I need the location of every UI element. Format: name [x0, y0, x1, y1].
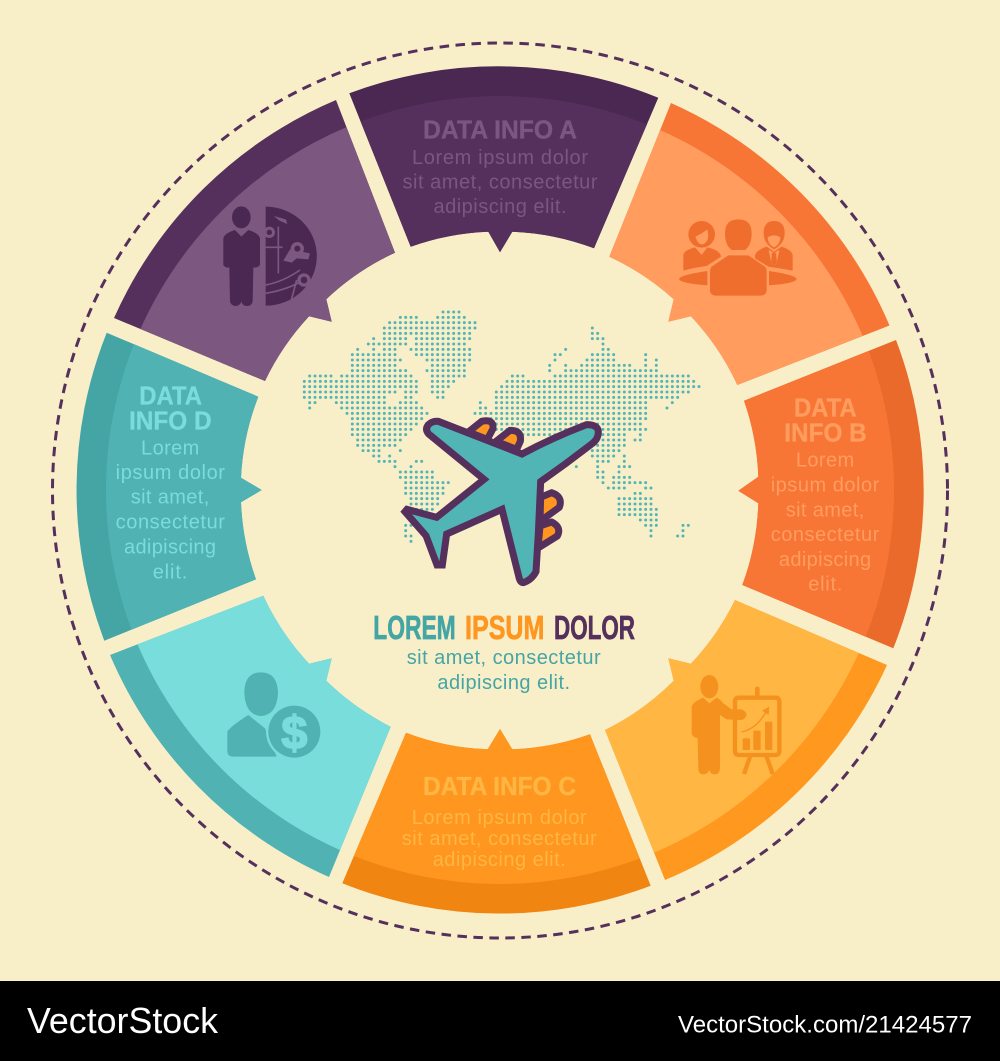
engine: wing bottom inner [538, 522, 559, 548]
panel: data info C [342, 729, 651, 914]
title: lorem ipsum dolor [373, 609, 635, 646]
text block: B: ipsum dolor [771, 475, 880, 497]
engine: wing top inner [496, 430, 521, 449]
heading: data info B [784, 393, 867, 448]
text block: D: ipsum dolor [116, 462, 225, 484]
heading: data info A: DATA INFO A [423, 115, 577, 145]
title: lorem ipsum dolor: LOREM [373, 609, 456, 646]
plane body [405, 421, 598, 583]
text block: B: elit. [808, 574, 842, 596]
text block: C: Lorem ipsum dolor [412, 807, 587, 829]
heading: data info D [129, 381, 212, 435]
text block: B: consectetur [771, 524, 880, 546]
text block: D: adipiscing [124, 536, 216, 558]
panel: data info D [77, 333, 262, 641]
text block: C: sit amet, consectetur [402, 828, 597, 850]
panel: data info A [349, 66, 658, 252]
panel: lower left, finance [110, 596, 391, 877]
footer bar [0, 981, 1000, 1061]
text block: C [402, 807, 597, 871]
panel: data info B [738, 340, 924, 648]
title: lorem ipsum dolor: DOLOR [554, 609, 635, 646]
subtitle: adipiscing elit. [437, 672, 570, 694]
text block: D: sit amet, [131, 487, 209, 509]
icon: team meeting [679, 219, 797, 296]
icon: presenter with chart [692, 675, 779, 774]
text block: C: adipiscing elit. [433, 849, 566, 871]
heading: data info C: DATA INFO C [423, 771, 576, 801]
text block: B: adipiscing [779, 549, 871, 571]
text block: A: Lorem ipsum dolor [412, 147, 588, 169]
text block: D: elit. [153, 561, 187, 583]
text block: A: sit amet, consectetur [402, 172, 598, 194]
text block: D: consectetur [116, 512, 225, 534]
heading: data info B: DATA [794, 393, 857, 423]
panel: upper left, global business [114, 100, 395, 381]
text block: A: adipiscing elit. [434, 196, 566, 218]
icon: person with dollar coin: $ [281, 706, 307, 758]
panel: lower right, presentation [605, 600, 887, 880]
icon: airplane [405, 421, 598, 583]
icon: person with dollar coin [227, 672, 323, 760]
subtitle: sit amet, consectetur [407, 647, 601, 669]
text block: D [116, 437, 225, 583]
footer logo text: VectorStock [27, 1000, 219, 1041]
heading: data info D: DATA [139, 381, 202, 411]
panel: upper right, team [609, 103, 890, 385]
engine: wing top outer [468, 421, 493, 439]
title: lorem ipsum dolor: IPSUM [465, 609, 544, 646]
chart: dotted world map [304, 312, 700, 541]
text block: B [771, 450, 880, 596]
text block: A [402, 147, 598, 218]
heading: data info B: INFO B [784, 418, 867, 448]
text block: B: Lorem [796, 450, 854, 472]
icon: businessman and globe [223, 206, 317, 306]
heading: data info D: INFO D [129, 405, 212, 435]
text block: D: Lorem [141, 437, 199, 459]
footer image id: VectorStock.com/21424577 [678, 1012, 972, 1039]
engine: wing bottom outer [540, 493, 560, 521]
subtitle [407, 647, 601, 694]
text block: B: sit amet, [786, 500, 864, 522]
dashed outer ring [52, 43, 948, 938]
